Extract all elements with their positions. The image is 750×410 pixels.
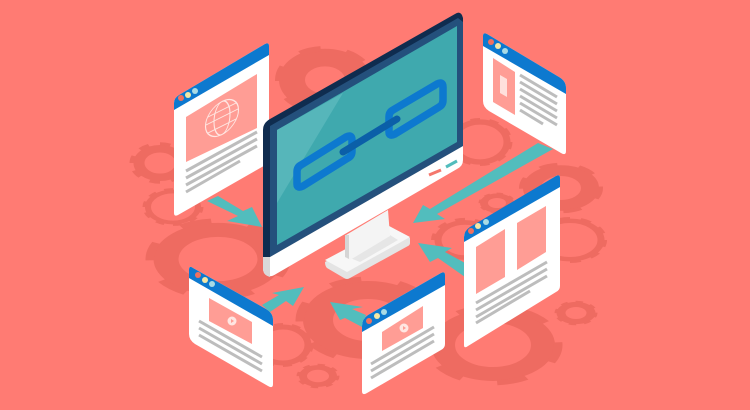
screen highlight xyxy=(277,93,343,203)
arrow: left window to monitor xyxy=(207,196,262,227)
image panel xyxy=(186,74,257,162)
image panel right xyxy=(517,206,546,270)
window header xyxy=(174,43,269,110)
window: top right xyxy=(483,33,566,154)
icon: play button xyxy=(228,316,236,326)
icon: chain link xyxy=(297,83,443,187)
arrow: bottom left window to monitor xyxy=(262,287,304,312)
text lines xyxy=(371,327,434,378)
image placeholder xyxy=(500,75,507,97)
gear: small bottom xyxy=(298,365,338,387)
gear: large centre bottom xyxy=(300,279,436,361)
arrow: long from top right window xyxy=(413,143,553,223)
window controls xyxy=(366,309,387,324)
gear: upper left xyxy=(132,144,188,182)
gear: large right xyxy=(522,165,600,211)
text lines xyxy=(199,321,262,371)
text lines xyxy=(476,262,547,323)
window: bottom left xyxy=(189,267,273,387)
window: bottom middle xyxy=(362,272,445,394)
window controls xyxy=(178,88,198,101)
window: right large xyxy=(464,175,560,347)
icon: globe xyxy=(206,93,238,143)
text lines xyxy=(520,75,557,125)
gear: small right xyxy=(556,302,596,324)
gear: left thin ring xyxy=(144,189,202,225)
gear: large left xyxy=(150,221,286,297)
window header xyxy=(189,267,273,326)
monitor xyxy=(263,13,463,279)
gear: large bottom right xyxy=(428,307,558,383)
gear: small between windows xyxy=(480,193,514,213)
window controls xyxy=(488,39,508,54)
window controls xyxy=(468,219,489,234)
background gears xyxy=(132,49,605,387)
monitor bezel xyxy=(270,18,463,257)
window controls xyxy=(195,272,215,287)
text lines xyxy=(186,132,257,192)
monitor stand xyxy=(325,210,410,279)
window header xyxy=(483,33,566,94)
gear: behind right window left side xyxy=(433,219,497,261)
monitor screen xyxy=(277,26,457,245)
image panel left xyxy=(476,229,505,294)
window header xyxy=(362,272,445,332)
chin side xyxy=(263,257,270,277)
window header xyxy=(464,175,560,242)
button teal xyxy=(446,161,457,167)
arrow: bottom middle window to monitor xyxy=(330,302,366,327)
gear: behind bottom left window xyxy=(254,324,312,366)
gear: top behind monitor xyxy=(279,49,371,111)
arrow: right window to monitor xyxy=(418,243,465,277)
image panel xyxy=(493,58,515,115)
monitor chin xyxy=(263,146,463,276)
button red xyxy=(429,170,441,175)
window: top left with globe xyxy=(174,43,269,216)
monitor back edge xyxy=(263,13,463,262)
image panel xyxy=(209,298,252,344)
image panel xyxy=(382,306,423,351)
gear: right of monitor xyxy=(449,119,511,165)
gear: behind right window right side xyxy=(535,218,605,262)
icon: play button xyxy=(400,324,408,332)
